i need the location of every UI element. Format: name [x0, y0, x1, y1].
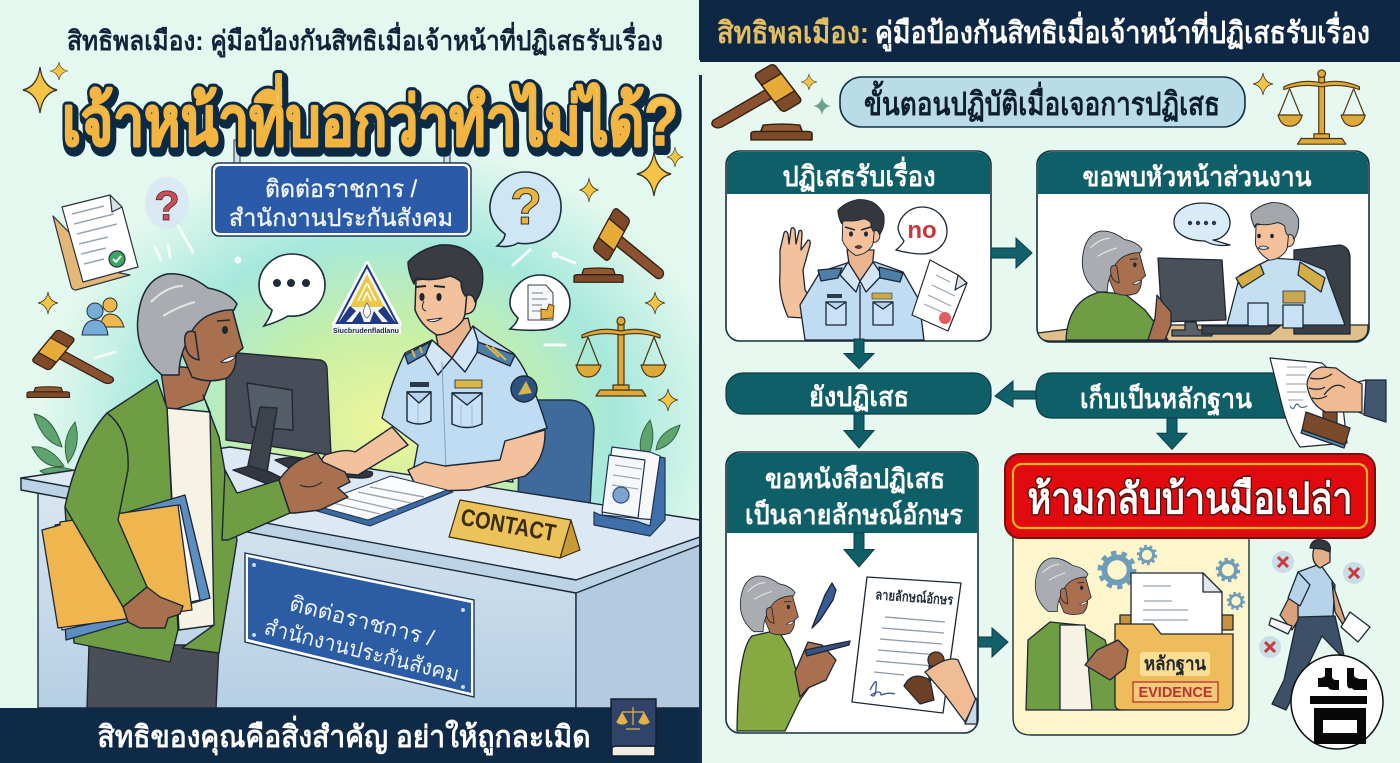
divider	[699, 0, 702, 60]
icon: social security logo: Siucbrudenfladlanu	[333, 326, 399, 335]
icon: decorative dashes	[95, 226, 575, 358]
icon: small sparkles	[801, 73, 1273, 115]
desk and people scene	[1038, 203, 1368, 341]
walking man with empty hands warning	[1259, 540, 1370, 710]
woman writing	[737, 576, 850, 731]
icon: law book	[611, 699, 656, 756]
woman arm and hand	[65, 413, 183, 628]
icon: social security logo	[332, 263, 401, 335]
card: ask for supervisor: ขอพบหัวหน้าส่วนงาน	[1082, 162, 1312, 192]
heading pill	[840, 77, 1245, 127]
hanging sign: สำนักงานประกันสังคม	[229, 205, 453, 232]
woman with folder	[1026, 558, 1125, 710]
icon: document with check	[53, 195, 138, 290]
brochure holder	[594, 447, 665, 536]
footer bar: left	[0, 708, 700, 763]
panel: left illustration	[0, 0, 700, 763]
icon: right plant	[640, 420, 680, 462]
card: evidence	[1013, 530, 1249, 735]
card: request written refusal: เป็นลายลักษณ์อักษร	[745, 497, 963, 530]
red warning banner: ห้ามกลับบ้านมือเปล่า	[1028, 475, 1352, 522]
evidence folder	[1085, 573, 1233, 710]
monitor	[226, 352, 372, 488]
arrow inside card	[844, 533, 874, 567]
rejected document	[912, 260, 967, 331]
icon: people	[82, 298, 124, 335]
evidence labels: หลักฐาน	[1144, 654, 1206, 677]
woman head	[138, 274, 243, 381]
card: refuse	[726, 151, 991, 341]
bubble: no	[896, 207, 947, 254]
arrow: card 1 down	[844, 339, 874, 369]
arrows: pills down	[844, 414, 1187, 449]
card: ask for supervisor	[1037, 151, 1369, 342]
arrow: evidence to still refused	[995, 381, 1037, 407]
document on desk	[306, 476, 453, 526]
icon: top right gavel	[574, 207, 664, 282]
icon: red question mark	[145, 177, 189, 229]
icon: speech bubble question	[490, 172, 561, 247]
icon: sign posts	[234, 140, 450, 164]
icon: hand stamping document	[1270, 358, 1386, 448]
arrow: card 3 to evidence	[978, 628, 1008, 657]
icon: bubble with dots	[259, 254, 325, 326]
blue desk plate: สำนักงานประกันสังคม	[262, 614, 462, 687]
officer torso and head	[382, 245, 547, 482]
title: left subtitle: สิทธิพลเมือง: คู่มือป้องกันสิทธิเมื่อเจ้าหน้าที่ปฏิเสธรับเรื่อง	[67, 21, 663, 58]
icon: right sparkles	[38, 147, 683, 411]
header bar: right: สิทธิพลเมือง:	[717, 17, 869, 50]
bubble: no: no	[907, 217, 937, 244]
chair	[518, 400, 594, 505]
contact name plate: CONTACT	[459, 504, 558, 547]
icon: bubble with document	[510, 275, 570, 330]
folder held by woman	[42, 495, 210, 640]
headline: เจ้าหน้าที่บอกว่าทำไม่ได้?	[62, 73, 678, 160]
footer bar: left: สิทธิของคุณคือสิ่งสำคัญ อย่าให้ถูกละเมิด	[98, 715, 590, 756]
step pill: still refused: ยังปฏิเสธ	[809, 382, 909, 412]
card: refuse: ปฏิเสธรับเรื่อง	[782, 156, 936, 193]
desk	[21, 447, 700, 708]
officer raising hand	[780, 200, 924, 340]
brand logo badge	[1291, 655, 1383, 749]
icon: gavel right panel	[712, 63, 812, 140]
arrow: card 1 to card 2	[991, 238, 1032, 268]
step pill: keep as evidence: เก็บเป็นหลักฐาน	[1080, 381, 1252, 417]
headline: เจ้าหน้าที่บอกว่าทำไม่ได้?	[62, 73, 678, 160]
icon: scales right	[1278, 70, 1365, 144]
evidence labels: EVIDENCE	[1138, 684, 1212, 701]
icon: left plant	[32, 414, 78, 478]
signed paper: ลายลักษณ์อักษร	[875, 586, 954, 608]
header bar: right	[700, 0, 1400, 62]
blue desk plate	[245, 553, 474, 697]
icon: left gavel	[27, 329, 113, 398]
card: request written refusal	[726, 452, 978, 733]
step pill: still refused	[726, 373, 991, 414]
panel: right flowchart	[700, 0, 1400, 763]
woman figure	[65, 365, 350, 708]
signed paper	[852, 577, 977, 724]
blue desk plate: ติดต่อราชการ /	[287, 591, 438, 651]
hanging sign	[212, 163, 471, 236]
officer arms	[322, 427, 545, 491]
icon: red question mark: ?	[154, 182, 180, 229]
headline: เจ้าหน้าที่บอกว่าทำไม่ได้?	[64, 77, 680, 164]
heading pill: ขั้นตอนปฏิบัติเมื่อเจอการปฏิเสธ	[864, 80, 1220, 122]
step pill: keep as evidence	[1036, 373, 1320, 418]
icon: sparkles top left	[23, 62, 68, 113]
red warning banner	[1005, 454, 1375, 538]
evidence labels	[1133, 652, 1218, 702]
card: request written refusal: ขอหนังสือปฏิเสธ	[765, 464, 945, 494]
icon: scales of justice	[576, 317, 666, 396]
icon: speech bubble question: ?	[510, 178, 542, 236]
gears	[1100, 546, 1244, 609]
hanging sign: ติดต่อราชการ /	[265, 176, 417, 203]
